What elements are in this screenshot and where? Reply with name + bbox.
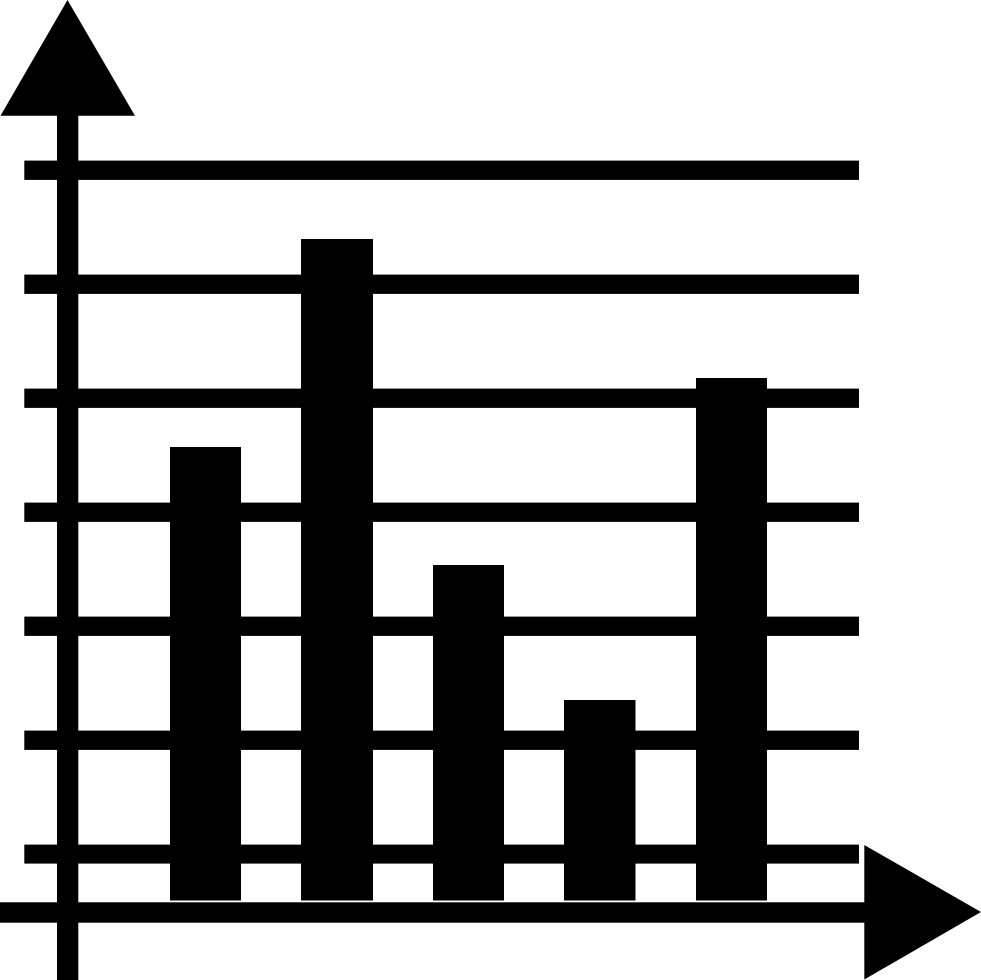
grid lines xyxy=(24,161,859,864)
bars xyxy=(170,239,767,900)
y axis arrow xyxy=(0,0,135,980)
x axis arrow xyxy=(0,845,981,980)
